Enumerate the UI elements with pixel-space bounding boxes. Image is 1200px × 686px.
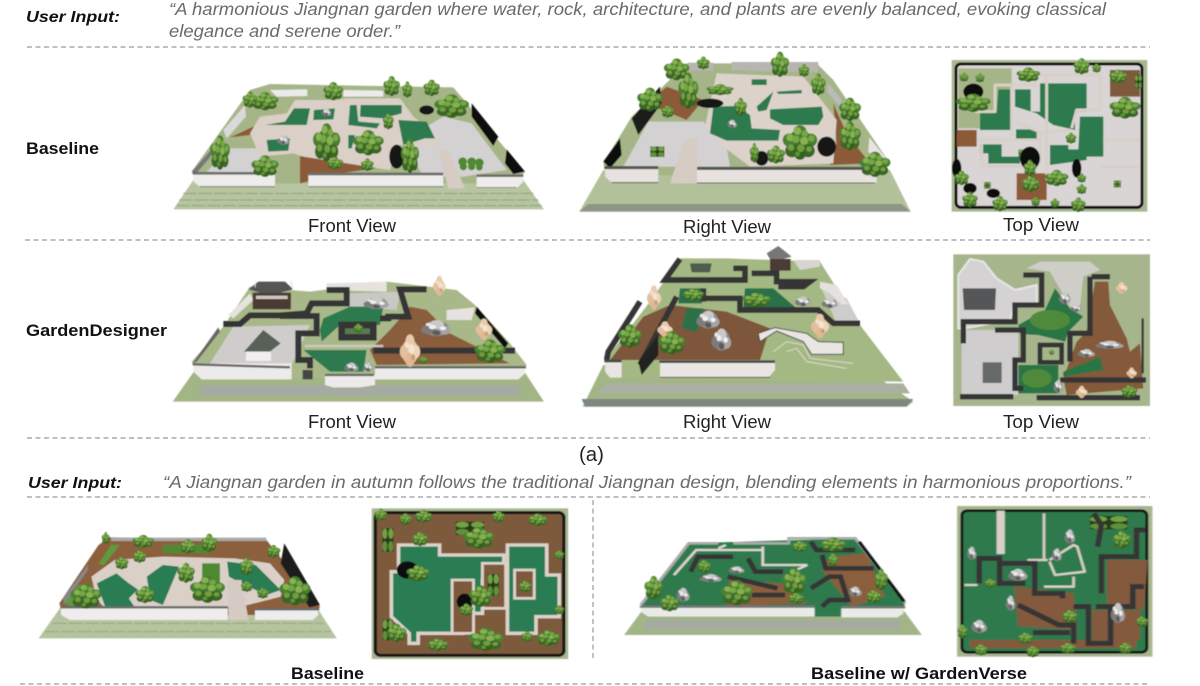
panel: baseline front view — [173, 76, 544, 209]
soil — [830, 103, 870, 165]
garden floor — [603, 63, 890, 175]
panel: baseline top view — [952, 58, 1147, 212]
outer walls — [641, 538, 905, 605]
walls — [603, 62, 890, 183]
paved courts — [958, 259, 1100, 395]
stone paths — [91, 557, 284, 608]
shadows — [952, 84, 1081, 198]
soil and court — [610, 285, 860, 360]
garden floor — [605, 258, 903, 382]
bridges — [305, 342, 383, 349]
front walls — [640, 607, 905, 617]
ponds — [265, 105, 435, 152]
trees — [954, 58, 1140, 212]
row label: GardenDesigner: GardenDesigner — [26, 321, 167, 340]
inner plots — [452, 563, 534, 633]
covered corridors — [607, 259, 860, 365]
pavilion — [767, 246, 792, 271]
panel: GardenDesigner top view — [953, 254, 1150, 406]
ground square — [372, 508, 568, 659]
text block: prompt 2: “A Jiangnan garden in autumn follows the traditional Jiangnan design, blending elements in harmonious proportions.” — [163, 472, 1132, 492]
tree shadows — [697, 99, 836, 166]
ground square — [953, 254, 1150, 406]
ponds — [97, 562, 281, 608]
heading: user input label 2: User Input: — [28, 475, 122, 492]
caption: row 1 right view: Right View — [683, 217, 772, 237]
front walls — [60, 607, 319, 620]
stone paths — [705, 73, 837, 167]
covered corridors — [223, 289, 515, 368]
ponds — [980, 83, 1103, 167]
trees — [1049, 282, 1138, 398]
crop grid — [1090, 516, 1127, 529]
shadows and trees — [374, 509, 564, 651]
terrain — [582, 365, 913, 407]
white paths — [674, 545, 807, 575]
dark wall ring — [956, 64, 1142, 207]
trees — [645, 537, 888, 612]
rocks — [696, 296, 838, 351]
curved paths on lawn — [773, 342, 853, 368]
panel: baseline right view — [579, 52, 911, 212]
trees — [958, 530, 1148, 657]
caption: bottom baseline: Baseline — [291, 665, 364, 683]
stone paths — [250, 98, 440, 170]
grass and paving — [957, 68, 1140, 200]
caption: row 1 top view: Top View — [1003, 215, 1080, 235]
ponds — [391, 545, 559, 643]
soil areas — [726, 553, 885, 607]
white paths — [964, 513, 1085, 587]
covered corridors — [691, 542, 874, 607]
heading: user input label 1: User Input: — [26, 9, 120, 26]
distant walls — [228, 282, 475, 320]
terrain — [173, 180, 544, 209]
stone paths — [975, 75, 1140, 178]
crop beds — [382, 522, 499, 640]
panel: bottom baseline top view — [372, 508, 568, 659]
hall roofs — [963, 288, 1002, 383]
paved court — [623, 122, 730, 167]
front walls — [604, 335, 775, 378]
ponds with lily pads — [1018, 288, 1103, 393]
covered corridors — [979, 513, 1146, 643]
ground square — [952, 60, 1147, 212]
rocks — [1054, 292, 1123, 393]
plant beds — [984, 75, 1142, 189]
pavilion — [248, 281, 293, 309]
panel: GardenDesigner right view — [582, 246, 913, 407]
plant bed — [650, 147, 664, 157]
ponds — [710, 79, 823, 141]
caption: row 2 front view: Front View — [308, 412, 397, 432]
soil and rock ground — [370, 307, 510, 365]
terrain — [39, 607, 337, 638]
soil zones — [970, 560, 1148, 648]
panel: bottom GardenVerse top view — [957, 506, 1152, 657]
garden floor — [641, 538, 905, 617]
subfigure marker: (a) — [579, 444, 604, 466]
trees — [70, 532, 311, 609]
dark wall ring and soil — [375, 513, 564, 655]
front walls — [193, 327, 526, 387]
tree shadows — [389, 105, 434, 169]
paved court — [210, 325, 310, 365]
back wall and crop beds — [63, 539, 320, 607]
panel: bottom GardenVerse front view — [624, 537, 922, 635]
walkway — [670, 138, 698, 183]
caption: row 2 top view: Top View — [1003, 412, 1080, 432]
soil — [1063, 282, 1143, 395]
far building — [690, 263, 712, 272]
trees — [618, 285, 829, 355]
panel: bottom baseline front view — [39, 532, 337, 638]
garden floor — [192, 282, 527, 378]
panel: GardenDesigner front view — [173, 276, 544, 402]
garden floor — [192, 84, 525, 183]
covered corridors — [960, 275, 1146, 398]
terrain — [173, 370, 544, 402]
garden floor — [59, 537, 320, 615]
walkway — [438, 150, 465, 188]
rocks — [967, 529, 1125, 633]
ground square — [957, 506, 1152, 657]
garden floor — [962, 511, 1147, 652]
ponds — [678, 288, 797, 332]
rocks — [344, 297, 451, 372]
caption: row 1 front view: Front View — [308, 216, 397, 236]
terrain — [624, 610, 922, 635]
trees — [637, 52, 890, 177]
walls — [192, 89, 525, 188]
ponds — [303, 307, 383, 372]
plant bed — [458, 157, 484, 171]
text block: prompt 1: elegance and serene order.” — [169, 21, 401, 41]
soil — [230, 127, 387, 183]
walkway — [227, 580, 249, 620]
caption: row 2 right view: Right View — [683, 412, 772, 432]
small hall — [244, 330, 281, 361]
trees — [354, 276, 505, 367]
caption: bottom baseline with GardenVerse: Baseline w/ GardenVerse — [811, 665, 1027, 683]
rocks — [677, 566, 862, 602]
terrain — [579, 170, 911, 212]
white garden walls — [758, 260, 848, 354]
row label: Baseline: Baseline — [26, 139, 99, 158]
paved court — [403, 117, 507, 177]
trees — [210, 76, 469, 177]
lily texture — [1022, 310, 1070, 388]
